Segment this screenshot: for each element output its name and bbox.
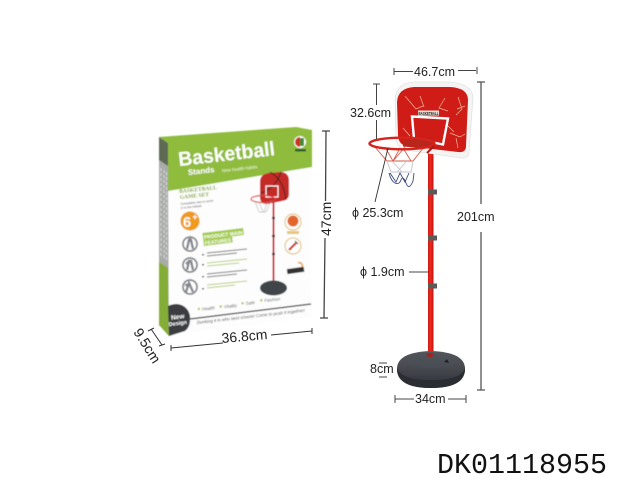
box title: Basketball [177,138,276,171]
box footer labels [197,296,281,312]
new design badge: New [171,313,186,322]
box title: Stands [187,165,215,177]
dimension 201cm [457,82,495,390]
feature icons [183,237,197,294]
dimension 47cm [318,131,334,318]
box footer slogan: Dunking it is who best shoots! Come to push it together! [197,308,306,325]
features heading: PRODUCT MAIN [204,230,243,241]
dimension 34cm: 34cm [415,392,446,406]
dimension 32.6cm: 32.6cm [350,106,391,120]
game set heading: Completely new to come [180,199,214,206]
new design badge [168,304,190,336]
hoop rim [370,138,435,153]
pole [428,150,434,356]
box footer labels: Safe [245,300,256,306]
dimension 25.3cm [352,148,403,220]
dimension 32.6cm [350,84,391,139]
weighted base [397,351,465,388]
dimension 46.7cm: 46.7cm [414,65,455,79]
box footer labels: Health [202,305,216,312]
backboard [395,82,473,158]
box front face [168,130,312,336]
green banner [159,127,312,191]
game set heading: BASKETBALL [179,185,218,195]
age badge 6+ [180,212,200,231]
basketball stand [370,82,473,388]
box footer labels: Vitality [224,303,238,309]
features heading [202,228,245,247]
box title: New health habits [222,164,258,173]
dimension 201cm: 201cm [457,210,495,224]
dimension 36.8cm [171,326,312,351]
box product image: hoop stand [251,172,289,296]
product box [159,127,312,336]
box footer labels: Fashion [264,296,281,303]
pole clamps [428,190,437,288]
age badge 6+: 6 [183,214,191,231]
backboard square [412,116,448,144]
box logo [294,136,306,152]
game set heading [179,185,219,210]
dimension 9.5cm: 9.5cm [130,325,164,366]
net [374,146,424,187]
feature text lines [203,249,247,290]
dimension 1.9cm [360,265,428,279]
features heading: FEATURES [204,238,232,247]
dimension 1.9cm: ϕ 1.9cm [360,265,405,279]
dimension 36.8cm: 36.8cm [221,326,268,346]
backboard: BASKETBALL [418,111,439,116]
game set heading: in to the market [181,204,202,210]
dimension 25.3cm: ϕ 25.3cm [352,206,403,220]
dimension 46.7cm [394,65,477,79]
dimension 8cm: 8cm [370,362,394,376]
box side panel [159,137,169,336]
box accessory icons [285,214,304,274]
dimension 34cm [395,392,466,406]
new design badge: Design [168,320,188,328]
age badge 6+: + [192,212,198,222]
game set heading: GAME SET [180,192,210,201]
backboard label [418,110,439,116]
dimension 47cm: 47cm [318,202,334,236]
